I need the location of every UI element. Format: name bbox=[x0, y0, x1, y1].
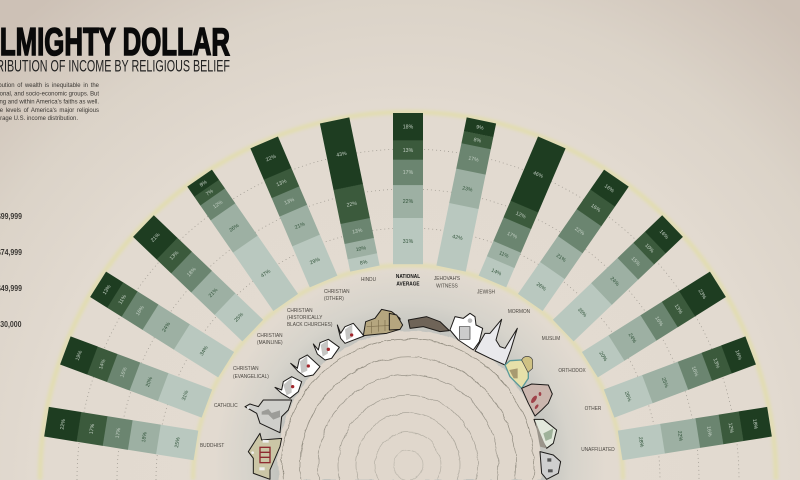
inner semicircle with shaded horizon bbox=[193, 265, 623, 480]
bar: Other: 25% bbox=[660, 377, 669, 389]
bar: Orthodox: 23% bbox=[697, 288, 707, 301]
bar: Unaffiliated: 12% bbox=[727, 422, 734, 434]
bar: National Average: 17% bbox=[403, 170, 414, 176]
category labels: CHRISTIAN bbox=[233, 366, 259, 372]
bar: Christian (Mainline): 21% bbox=[150, 232, 162, 244]
bar: Jehovah's Witness: 17% bbox=[468, 156, 479, 164]
bar: Buddhist: 18% bbox=[141, 431, 149, 443]
bar: Christian (Evangelical): 11% bbox=[118, 294, 128, 306]
bar: Hindu: 43% bbox=[336, 151, 348, 159]
bar: Jewish: 11% bbox=[498, 250, 510, 260]
buildings: left side bbox=[245, 309, 400, 479]
category labels: MUSLIM bbox=[542, 336, 560, 342]
icon: Hindu temple right edge bbox=[389, 313, 403, 330]
inner yellow arc bbox=[193, 265, 623, 480]
bar: Christian (Historically Black Churches): 47% bbox=[260, 268, 272, 279]
category labels: NATIONAL bbox=[396, 274, 421, 280]
icon: Orthodox church bbox=[522, 384, 552, 416]
intro text block bbox=[0, 83, 100, 122]
bar: National Average: 22% bbox=[403, 199, 414, 205]
bar: Christian (Historically Black Churches): 7% bbox=[205, 188, 215, 198]
bar: Buddhist: 22% bbox=[60, 418, 67, 430]
bar: Jehovah's Witness: 9% bbox=[476, 124, 484, 132]
category labels: (OTHER) bbox=[324, 296, 344, 302]
bar: Christian (Historically Black Churches): 8% bbox=[199, 179, 209, 188]
bar: Jehovah's Witness: 42% bbox=[452, 234, 463, 242]
bar: Mormon: 16% bbox=[589, 203, 602, 214]
bar: Orthodox bbox=[582, 272, 726, 377]
bar: Christian (Other): 29% bbox=[309, 257, 321, 266]
income bracket legend bbox=[0, 211, 23, 329]
bar: Muslim: 15% bbox=[630, 256, 641, 268]
bar: Unaffiliated bbox=[618, 407, 772, 460]
bar: Jewish: 14% bbox=[490, 268, 503, 278]
category labels: ORTHODOX bbox=[558, 368, 586, 374]
category labels: BLACK CHURCHES) bbox=[287, 322, 333, 328]
ground disc with wavy income contour lines bbox=[278, 331, 542, 480]
bar: Muslim: 16% bbox=[658, 229, 670, 241]
bar: Catholic bbox=[60, 336, 212, 418]
bar: Christian (Evangelical): 24% bbox=[161, 321, 172, 333]
bar: Jewish bbox=[479, 137, 566, 287]
bar: Christian (Other): 13% bbox=[276, 178, 288, 188]
category labels: (EVANGELICAL) bbox=[233, 374, 269, 380]
category labels: CHRISTIAN bbox=[324, 289, 350, 295]
bar: Christian (Evangelical) bbox=[90, 272, 234, 377]
category labels: HINDU bbox=[361, 277, 376, 283]
bar: Christian (Mainline): 21% bbox=[208, 287, 220, 299]
bar: Unaffiliated: 16% bbox=[705, 426, 713, 437]
category labels: MORMON bbox=[508, 309, 530, 315]
bar: Buddhist: 17% bbox=[89, 423, 96, 435]
bar: Buddhist bbox=[44, 407, 198, 460]
category labels: JEWISH bbox=[477, 289, 495, 296]
bar: Unaffiliated: 22% bbox=[676, 430, 683, 442]
bar: Orthodox: 16% bbox=[653, 316, 664, 328]
bar: Jewish: 12% bbox=[515, 211, 527, 220]
bar: Hindu: 8% bbox=[359, 259, 368, 267]
bar: National Average: 18% bbox=[403, 124, 414, 130]
bar: Jewish: 17% bbox=[506, 231, 518, 241]
icon: Buddhist temple bbox=[248, 433, 282, 479]
bar: Jehovah's Witness: 23% bbox=[462, 186, 473, 194]
bar: Catholic: 19% bbox=[75, 349, 84, 362]
bar: Christian (Historically Black Churches): 12% bbox=[212, 199, 224, 210]
bar: Buddhist: 17% bbox=[115, 427, 122, 439]
bar: Christian (Evangelical): 13% bbox=[102, 284, 113, 296]
bar: Muslim bbox=[553, 215, 683, 341]
bar: Jehovah's Witness bbox=[436, 117, 496, 272]
category labels: OTHER bbox=[585, 406, 602, 412]
bar: Other: 26% bbox=[623, 391, 632, 403]
bar: Christian (Evangelical): 16% bbox=[135, 305, 146, 317]
category labels: (MAINLINE) bbox=[257, 340, 283, 346]
icon: Evangelical church bbox=[275, 377, 302, 398]
bar: Mormon: 22% bbox=[573, 226, 586, 237]
bar: Christian (Mainline): 13% bbox=[169, 250, 181, 262]
bar: National Average: 13% bbox=[403, 148, 414, 154]
category labels: BUDDHIST bbox=[200, 443, 225, 449]
category labels: CHRISTIAN bbox=[257, 333, 283, 339]
bar: Other: 13% bbox=[711, 357, 721, 370]
category labels: WITNESS bbox=[436, 283, 458, 290]
bar: Catholic: 16% bbox=[119, 366, 129, 378]
category labels: CATHOLIC bbox=[214, 403, 238, 409]
bar: Mormon bbox=[518, 170, 629, 311]
bar: Orthodox: 20% bbox=[597, 351, 608, 363]
bar: Hindu bbox=[320, 117, 380, 272]
bar: Christian (Historically Black Churches): 26% bbox=[228, 223, 241, 234]
bar: Catholic: 31% bbox=[181, 389, 190, 401]
bar: Other bbox=[604, 336, 756, 418]
category labels: JEHOVAH'S bbox=[434, 276, 461, 282]
category labels: AVERAGE bbox=[396, 281, 420, 288]
icon: Historically Black church bbox=[313, 339, 339, 360]
bar: National Average bbox=[393, 113, 423, 264]
bar: Mormon: 26% bbox=[535, 282, 547, 293]
dotted income rings bbox=[77, 149, 739, 480]
bar: Christian (Other): 22% bbox=[265, 154, 277, 163]
icon: Hindu temple bbox=[363, 309, 400, 336]
outer yellow arc bbox=[40, 112, 776, 480]
bar: Catholic: 14% bbox=[98, 358, 108, 370]
icon: dark temple bbox=[408, 317, 449, 332]
bar: Orthodox: 24% bbox=[627, 332, 637, 345]
bar: National Average: 31% bbox=[403, 239, 414, 245]
icon: Jehovah's Witness hall bbox=[450, 313, 483, 350]
bar: Unaffiliated: 18% bbox=[751, 418, 759, 430]
category labels: CHRISTIAN bbox=[287, 308, 313, 314]
icon: Other Christian church bbox=[337, 323, 364, 343]
bar: Jehovah's Witness: 8% bbox=[473, 137, 482, 145]
bar: Christian (Other) bbox=[250, 137, 337, 287]
icon: Unaffiliated house bbox=[540, 452, 561, 479]
bar: Mormon: 21% bbox=[555, 253, 567, 264]
bar: Christian (Historically Black Churches) bbox=[187, 170, 298, 311]
bar: Orthodox: 13% bbox=[673, 303, 684, 316]
bar: Hindu: 22% bbox=[346, 201, 358, 209]
bar: Christian (Other): 13% bbox=[284, 197, 296, 207]
bar: Muslim: 10% bbox=[643, 243, 655, 255]
bar: Hindu: 10% bbox=[355, 245, 367, 253]
icon: Catholic church bbox=[245, 400, 292, 433]
bar: Christian (Evangelical): 34% bbox=[199, 345, 210, 357]
bar: Hindu: 13% bbox=[352, 228, 363, 236]
bar: Unaffiliated: 28% bbox=[637, 437, 644, 448]
icon: mosque bbox=[505, 356, 533, 388]
bar: Muslim: 24% bbox=[609, 276, 620, 288]
bar: Jewish: 46% bbox=[532, 170, 544, 180]
bar: Buddhist: 25% bbox=[174, 437, 182, 448]
bar: Mormon: 16% bbox=[603, 183, 615, 194]
icon: Mainline church bbox=[291, 355, 320, 377]
bar: Other: 16% bbox=[690, 366, 699, 378]
category labels: UNAFFILIATED bbox=[581, 447, 615, 453]
bar: Christian (Mainline): 18% bbox=[186, 266, 198, 278]
icon: Mormon temple bbox=[475, 319, 517, 365]
bar: Other: 16% bbox=[733, 349, 743, 361]
bar: Christian (Other): 21% bbox=[294, 221, 306, 231]
icon: Other faith pavilion bbox=[534, 419, 557, 448]
category labels: (HISTORICALLY bbox=[287, 315, 323, 321]
bar: Christian (Mainline) bbox=[133, 215, 263, 341]
buildings: right side bbox=[389, 313, 561, 479]
bar: Christian (Mainline): 25% bbox=[233, 312, 245, 323]
bar: Muslim: 35% bbox=[576, 307, 588, 319]
category labels bbox=[200, 274, 615, 453]
bar: Catholic: 20% bbox=[145, 376, 154, 388]
